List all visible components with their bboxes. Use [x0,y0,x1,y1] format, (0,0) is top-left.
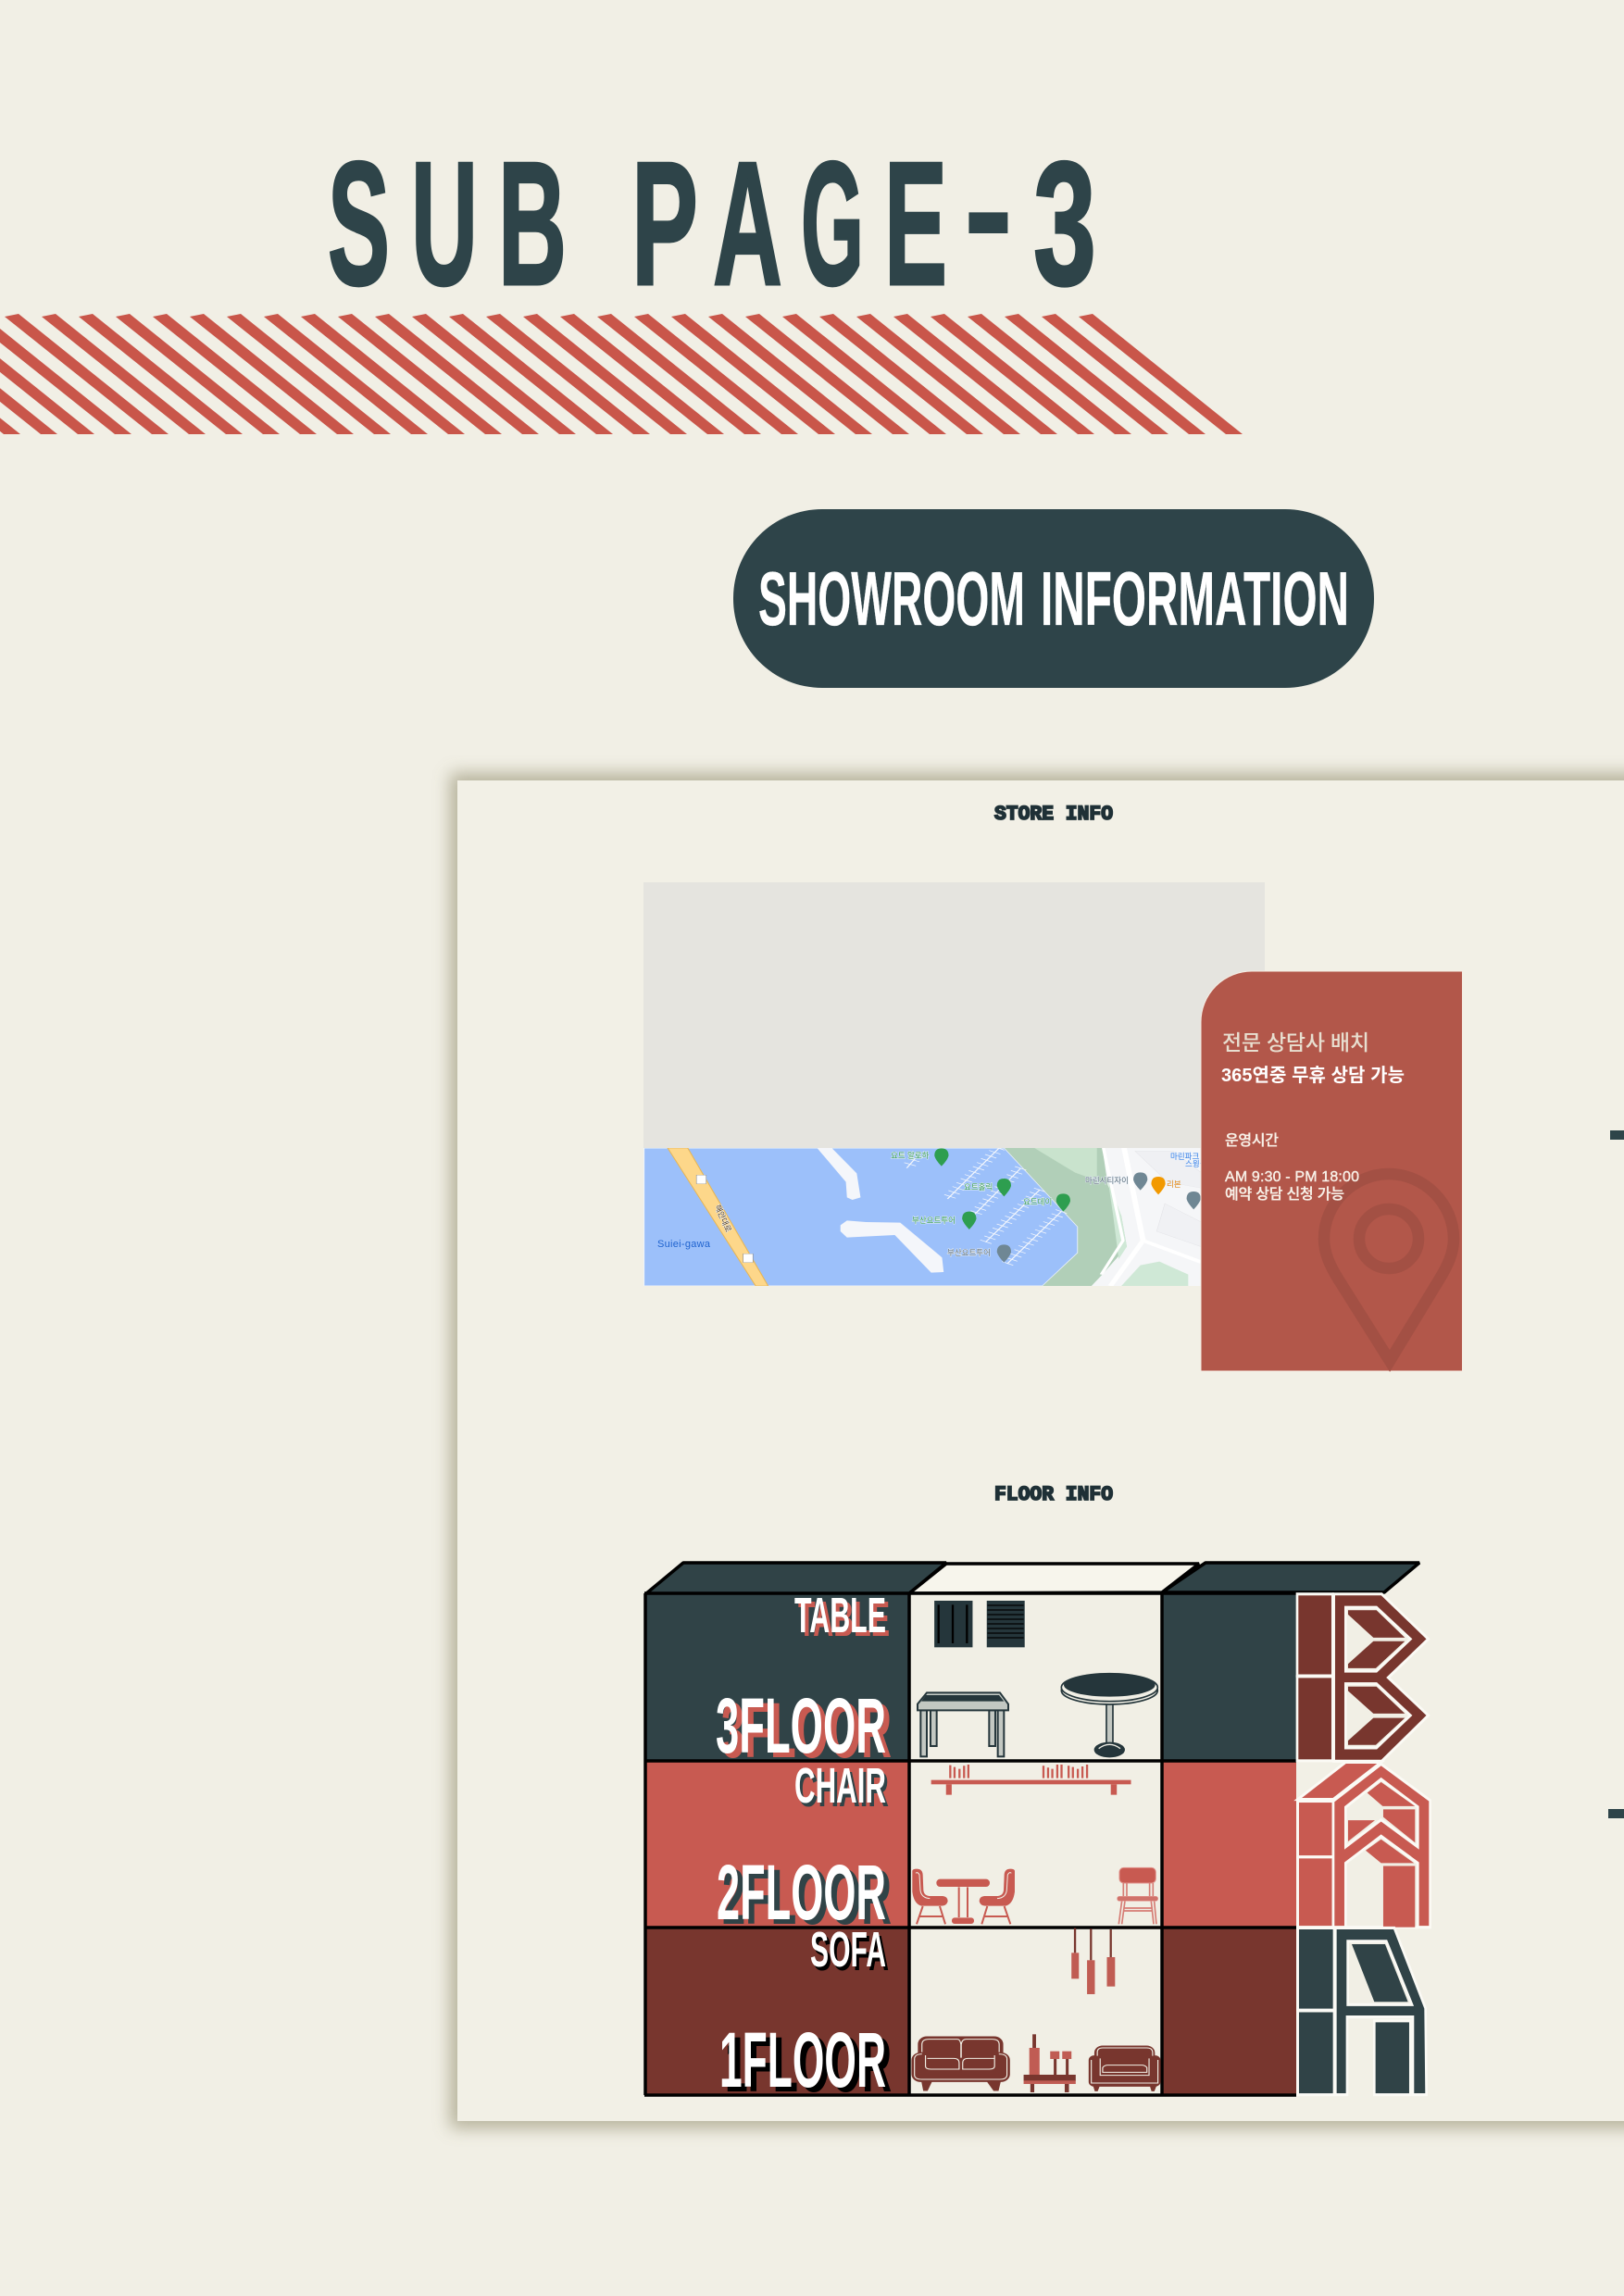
sign letter A (teal) [1298,1928,1427,2095]
map: 요트 알로하 [891,1151,930,1160]
map pins [934,1148,949,1167]
piers [817,1148,860,1200]
map [643,1148,1206,1286]
title: E [884,126,947,322]
small tick mark upper right [1610,1130,1624,1140]
map: 마린시티자이 [1085,1176,1129,1185]
card text: open all year: 365연중 무휴 상담 가능 [1221,1065,1405,1086]
card text: counselor: 전문 상담사 배치 [1222,1030,1369,1054]
map: 해안대로 [713,1204,733,1234]
title: P [631,126,696,322]
label: table: TABLE [794,1588,886,1643]
map: 리본 [1167,1179,1181,1189]
roof [645,1563,1419,1594]
icon: square table [918,1692,1008,1756]
pill heading: showroom information: SHOWROOM [758,555,1025,642]
icon: small sofa [1089,2046,1160,2090]
map: 부산요트투어 [912,1216,956,1225]
floor diagram [644,1563,1430,2103]
floor 3 band [644,1593,909,1761]
heading: floor info: FLOOR INFO [994,1483,1113,1506]
map: 부산요트투어 [947,1248,991,1257]
title: A [713,126,781,322]
icon: location pin watermark [1324,1174,1454,1361]
label: chair: CHAIR [794,1758,886,1814]
diagonal striped banner [0,314,1243,434]
icon: round table [1061,1673,1157,1757]
icon: wall shelf with books [931,1765,1131,1795]
title: B [498,126,567,322]
title: U [411,126,478,322]
map: 마린파크 [1170,1152,1199,1161]
floor 1 band [644,1928,909,2095]
map placeholder area [643,882,1265,1148]
title: - [963,110,1014,306]
title: G [801,126,864,322]
icon: single chair [1118,1867,1158,1924]
pill heading: showroom information [733,509,1374,688]
icon: dining set [912,1868,1015,1924]
title: S [328,126,390,322]
label: sofa: SOFA [810,1922,886,1978]
icon: side table with vase [1024,2034,1076,2092]
marina docks [906,1148,1062,1264]
title: 3 [1033,126,1096,322]
heading: store info: STORE INFO [994,803,1113,826]
label: 2floor: 2FLOOR [717,1849,886,1936]
icon: large sofa [912,2037,1009,2090]
map: 요트홀릭 [964,1182,993,1192]
pill heading: showroom information: INFORMATION [1041,555,1349,642]
map: Suiei-gawa [657,1239,711,1250]
card text: hours label: 운영시간 [1225,1132,1279,1149]
floor 2 band [644,1761,909,1928]
panel: main sheet [450,773,1624,2128]
sign letter B [1297,1594,1429,1761]
icon: wall vents [934,1601,1025,1647]
icon: pendant lamps [1071,1928,1115,1994]
small tick mark lower right [1608,1809,1624,1818]
label: 3floor: 3FLOOR [716,1682,886,1769]
info card [1201,971,1463,1371]
map: 요트데이 [1023,1197,1052,1206]
card text: reservation: 예약 상담 신청 가능 [1225,1186,1344,1203]
road [668,1148,768,1286]
sign letter A (red) [1298,1762,1430,1928]
card text: hours: AM 9:30 - PM 18:00 [1225,1169,1359,1185]
label: 1floor: 1FLOOR [719,2016,886,2103]
map: 스윙될 [1185,1159,1206,1168]
